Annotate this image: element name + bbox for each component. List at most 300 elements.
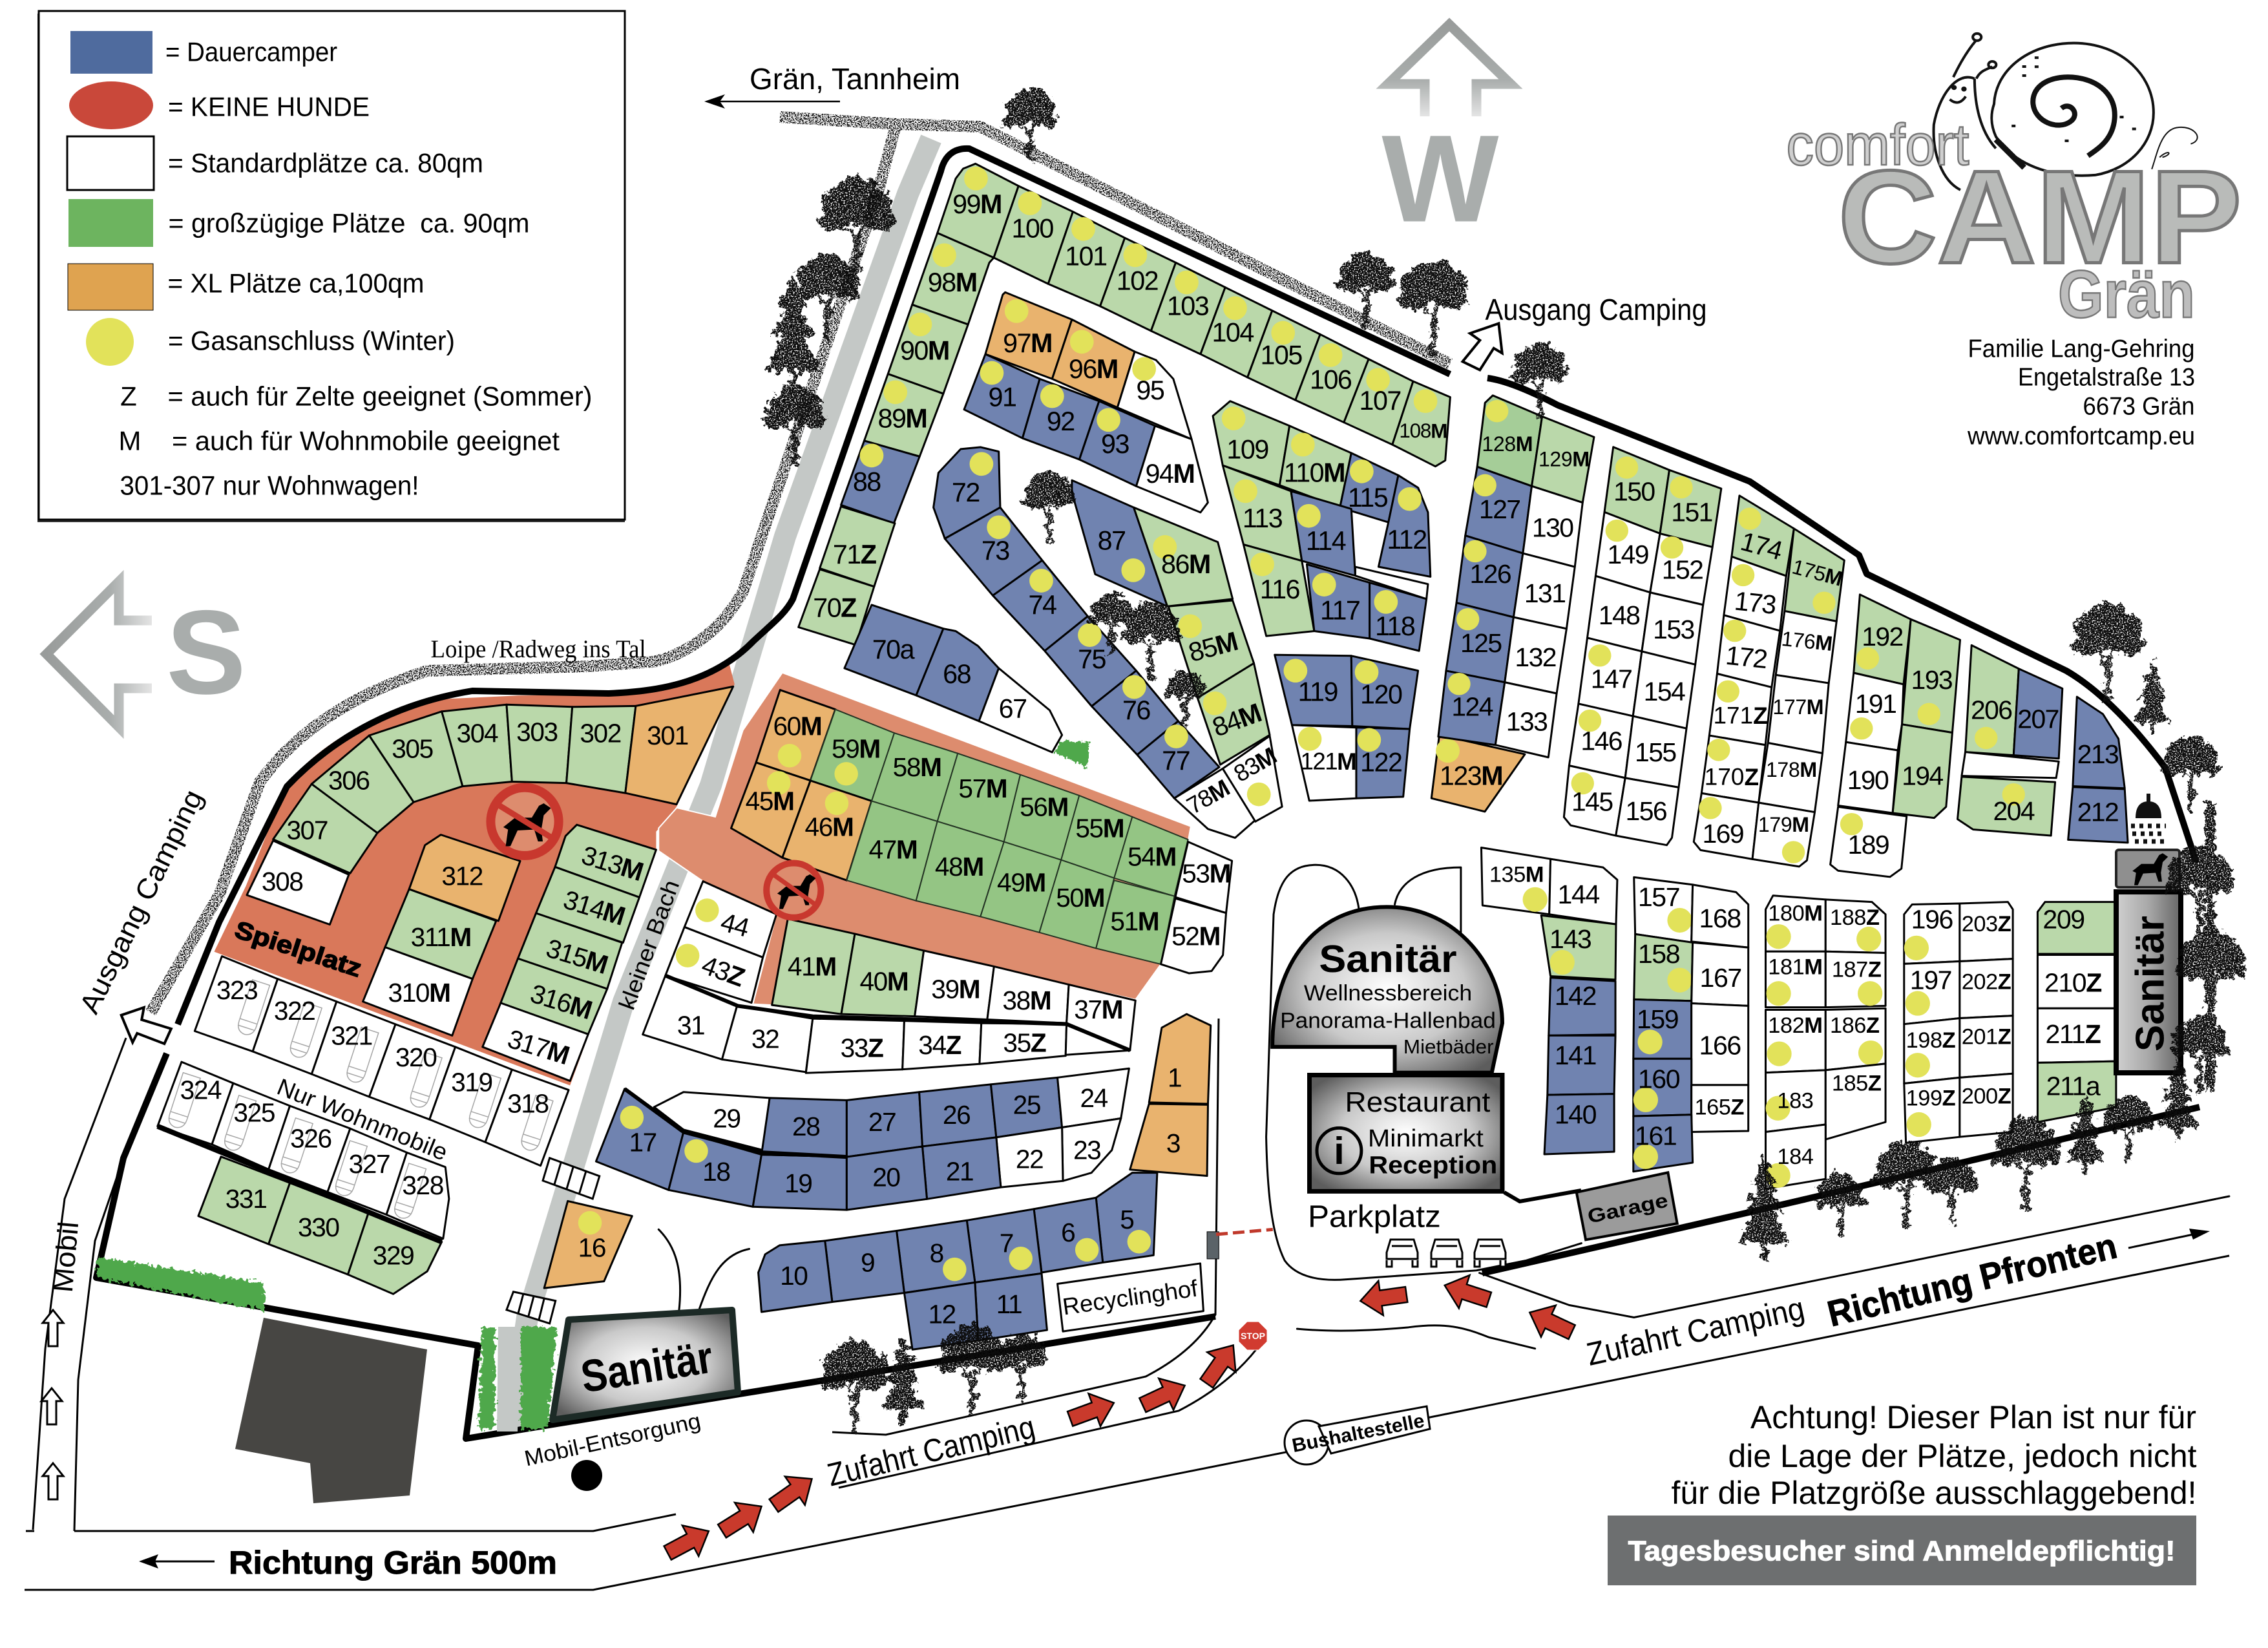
Restaurant and reception building: i <box>1334 1129 1345 1172</box>
pitch 115: 115 <box>1348 483 1388 512</box>
parking label: Parkplatz <box>1308 1200 1441 1234</box>
pitch 324: 324 <box>180 1075 222 1105</box>
pitch 39M: 39M <box>931 975 980 1004</box>
pitch 186Z: 186Z <box>1830 1013 1880 1038</box>
direction label Grän Tannheim <box>704 62 960 109</box>
pitch 190 <box>1838 742 1898 813</box>
path lines to Sanitär <box>658 1229 750 1311</box>
pitch 129M: 129M <box>1538 448 1590 471</box>
pitch 150: 150 <box>1613 476 1655 506</box>
pitch 122 <box>1356 728 1410 798</box>
pitch 148: 148 <box>1599 600 1639 630</box>
pitch 198Z <box>1904 1019 1960 1084</box>
pitch 155: 155 <box>1635 737 1676 767</box>
compass west arrow and letter <box>1381 25 1511 248</box>
pitch 314M: 314M <box>560 885 628 931</box>
pitch 194: 194 <box>1902 761 1943 791</box>
pitch 110M: 110M <box>1284 458 1345 488</box>
pitch 131: 131 <box>1524 578 1565 608</box>
icon: dog wash box <box>2116 850 2179 887</box>
pitch 41M: 41M <box>788 951 836 981</box>
pitch 209 <box>2037 902 2116 954</box>
legend: Z Zelte: = auch für Zelte geeignet (Sommer) <box>168 381 592 411</box>
pitch 109: 109 <box>1226 435 1268 465</box>
address block <box>1967 335 2195 450</box>
pitch 49M: 49M <box>997 868 1045 898</box>
pitch 142: 142 <box>1555 981 1596 1011</box>
pitch 76: 76 <box>1122 695 1150 725</box>
arrow: Ausgang Camping west <box>121 1008 171 1044</box>
pitch 12 <box>904 1282 978 1349</box>
pitch 128M: 128M <box>1482 432 1533 456</box>
pitch 31: 31 <box>677 1011 704 1041</box>
pitch 176M <box>1776 611 1836 683</box>
grass strip south-west <box>97 1257 264 1311</box>
pitch 312 <box>409 835 520 921</box>
pitch 301: 301 <box>647 721 688 750</box>
pitch 174: 174 <box>1738 526 1785 565</box>
pitch 92 <box>1022 379 1099 460</box>
pitch 159: 159 <box>1637 1004 1678 1034</box>
tree <box>819 1340 890 1433</box>
pitch 207: 207 <box>2017 704 2059 734</box>
pitch 307 <box>273 784 377 873</box>
tree <box>1815 1172 1865 1238</box>
tree <box>764 275 821 391</box>
pitch 96M: 96M <box>1069 354 1118 384</box>
Sanitär dome building <box>1272 907 1502 1073</box>
pitch 10: 10 <box>780 1261 808 1291</box>
pitch 3: 3 <box>1166 1128 1180 1158</box>
pitch 211a <box>2037 1061 2116 1122</box>
legend shadow and frame <box>37 11 625 522</box>
pitch 105: 105 <box>1260 340 1302 370</box>
pitch 102: 102 <box>1117 266 1158 296</box>
pitch 211a: 211a <box>2046 1071 2101 1101</box>
pitch 146: 146 <box>1580 726 1622 755</box>
pitch 304 <box>442 704 512 787</box>
pitch 34Z <box>903 1021 982 1070</box>
pitch 185Z: 185Z <box>1832 1072 1882 1096</box>
pitch 181M <box>1765 951 1825 1008</box>
pitch 44: 44 <box>718 907 752 943</box>
pitch 10 <box>759 1241 832 1312</box>
pitch 165Z: 165Z <box>1694 1095 1744 1119</box>
pitch 330: 330 <box>298 1212 339 1242</box>
pitch 54M: 54M <box>1128 842 1176 872</box>
pitch 182M: 182M <box>1768 1013 1823 1038</box>
pitch 85M: 85M <box>1185 626 1241 668</box>
pitch 193: 193 <box>1911 665 1952 695</box>
pitch 147: 147 <box>1591 664 1632 694</box>
pitch 45M <box>731 763 810 858</box>
pitch 39M <box>915 951 994 1020</box>
pitch 103 <box>1151 262 1225 354</box>
grass patch <box>1054 740 1089 768</box>
grass strips at Sanitär <box>478 1327 557 1429</box>
pitch 84M: 84M <box>1208 698 1265 743</box>
pitch 198Z: 198Z <box>1906 1028 1956 1053</box>
pitch 302: 302 <box>580 718 621 748</box>
pitch 127 <box>1465 467 1532 553</box>
pitch 167 <box>1692 942 1748 1006</box>
pitch 146 <box>1569 704 1633 778</box>
pitch 101: 101 <box>1065 241 1107 271</box>
pitch 172 <box>1717 615 1780 687</box>
gap box by 204 <box>1962 752 2059 778</box>
pitch 144 <box>1549 859 1617 924</box>
pitch 185Z <box>1825 1064 1885 1139</box>
pitch 100: 100 <box>1012 214 1053 244</box>
pitch 113 <box>1223 465 1302 561</box>
pitch 327 <box>328 1128 407 1214</box>
tree <box>936 1324 1007 1417</box>
pitch 5 <box>1096 1173 1157 1263</box>
pitch 182M <box>1765 1009 1825 1073</box>
pitch 104: 104 <box>1212 317 1254 347</box>
icon: no dogs sign west <box>490 788 559 856</box>
pitch 107: 107 <box>1360 386 1401 416</box>
pitch 305: 305 <box>392 734 433 763</box>
pitch 18: 18 <box>702 1157 730 1187</box>
label Loipe Radweg: Loipe /Radweg ins Tal <box>430 635 646 663</box>
pitch 22 <box>996 1127 1063 1187</box>
pitch 123M: 123M <box>1440 761 1502 791</box>
pitch 31 <box>643 975 737 1059</box>
pitch 202Z <box>1960 959 2013 1019</box>
pitch 72 <box>934 447 1000 538</box>
pitch 150 <box>1604 447 1669 534</box>
arrows: Mobil road <box>41 1310 63 1499</box>
pitch 109 <box>1213 401 1290 485</box>
Sanitär dome building: Mietbäder <box>1403 1036 1494 1058</box>
pitch 28: 28 <box>792 1112 819 1141</box>
icon: stop sign <box>1239 1322 1267 1350</box>
pitch 106 <box>1296 334 1369 423</box>
pitch 99M <box>938 164 1018 258</box>
pitch 147 <box>1579 638 1642 716</box>
pitch 45M: 45M <box>746 786 794 816</box>
pitch 46M: 46M <box>805 812 853 841</box>
pitch 149 <box>1595 512 1660 593</box>
label Spielplatz: Spielplatz <box>231 916 365 983</box>
access road line <box>1297 1196 2229 1349</box>
pitch 204 <box>1957 777 2055 836</box>
pitch 6: 6 <box>1061 1218 1075 1247</box>
pitch 6 <box>1034 1198 1103 1273</box>
pitch 85M <box>1168 600 1254 698</box>
pitch 18 <box>669 1132 761 1207</box>
pitch 165Z <box>1692 1085 1748 1132</box>
legend: keine Hunde: = KEINE HUNDE <box>168 92 370 121</box>
tree <box>1021 471 1076 543</box>
Sanitär dome building: Sanitär <box>1319 937 1457 980</box>
pitch 103: 103 <box>1167 291 1209 321</box>
pitch 154 <box>1633 651 1696 728</box>
pitch 88: 88 <box>853 467 881 496</box>
pitch 203Z: 203Z <box>1962 912 2011 936</box>
address block: www.comfortcamp.eu <box>1967 423 2195 450</box>
pitch 303: 303 <box>516 717 558 746</box>
pitch 315M <box>518 913 622 989</box>
pitch 35Z <box>980 1023 1067 1064</box>
pitch 157 <box>1634 877 1693 942</box>
pitch 211Z <box>2037 1008 2116 1062</box>
label Mobil: Mobil <box>47 1220 85 1294</box>
notice text: die Lage der Plätze, jedoch nicht <box>1728 1438 2197 1474</box>
red no-dog road zone west <box>214 662 735 1086</box>
pitch 37M: 37M <box>1074 995 1122 1024</box>
pitch 95 <box>1117 352 1192 439</box>
pitch 26 <box>919 1084 996 1146</box>
pitch 330 <box>269 1183 368 1274</box>
pitch 27 <box>846 1092 923 1157</box>
perimeter wall south-east <box>1482 1107 2200 1273</box>
tree <box>1926 1158 1977 1224</box>
notice text <box>1671 1399 2197 1511</box>
pitch 40M <box>841 934 924 1017</box>
pitch 94M: 94M <box>1146 459 1194 489</box>
pitch 37M <box>1067 985 1135 1050</box>
pitch 1: 1 <box>1168 1062 1181 1092</box>
pitch 318: 318 <box>507 1089 549 1119</box>
pitch 113: 113 <box>1243 503 1283 533</box>
pitch 189 <box>1831 807 1907 877</box>
pitch 108M: 108M <box>1399 419 1447 442</box>
pitch 26: 26 <box>943 1100 970 1130</box>
pitch 8 <box>897 1220 975 1293</box>
icon: cars parking <box>1387 1240 1506 1267</box>
pitch 328 <box>386 1152 449 1239</box>
address block: 6673 Grän <box>2083 393 2194 420</box>
arrows: red approach east <box>1358 1269 1579 1348</box>
pitch 89M <box>864 374 943 456</box>
pitch 68: 68 <box>943 659 971 689</box>
pitch 166: 166 <box>1699 1031 1741 1061</box>
pitch 326 <box>269 1106 350 1192</box>
pitch 70a <box>845 605 943 695</box>
legend: XL Plätze: = XL Plätze ca,100qm <box>168 268 424 299</box>
logo: Grän: Grän <box>2058 257 2195 332</box>
pitch 100 <box>994 186 1073 284</box>
pitch 301 <box>625 686 733 805</box>
pitch 325 <box>212 1083 290 1169</box>
pitch 29: 29 <box>713 1103 740 1133</box>
pitch 153: 153 <box>1653 615 1694 644</box>
pitch 17 <box>596 1089 684 1190</box>
pitch 132 <box>1505 617 1566 693</box>
pitch 318 <box>485 1070 569 1166</box>
pitch 35Z: 35Z <box>1003 1028 1046 1057</box>
label Zufahrt Camping east: Zufahrt Camping <box>1583 1290 1808 1373</box>
Sanitär east building: Sanitär <box>2128 916 2172 1051</box>
label Kleiner Bach: kleiner Bach <box>614 877 684 1013</box>
pitch 196: 196 <box>1911 904 1953 934</box>
Sanitär dome building: Wellnessbereich <box>1304 981 1472 1006</box>
pitch 200Z: 200Z <box>1962 1084 2011 1108</box>
compass west arrow and letter: W <box>1381 109 1499 248</box>
pitch 89M: 89M <box>878 403 927 433</box>
pitch 33Z: 33Z <box>841 1033 883 1063</box>
tree <box>762 385 826 467</box>
pitch 191 <box>1846 673 1904 750</box>
pitch 158: 158 <box>1638 939 1680 969</box>
pitch 183: 183 <box>1777 1088 1813 1113</box>
pitch 129M <box>1532 416 1594 503</box>
perimeter fence north and west <box>178 149 1450 1024</box>
pitch 50M: 50M <box>1056 883 1104 913</box>
dividing wall 17-28 <box>625 1089 846 1157</box>
gap triangle by 35Z <box>1066 1024 1130 1055</box>
pitch 159 <box>1633 999 1692 1059</box>
pitch 54M <box>1114 817 1188 896</box>
pitch 302 <box>567 706 636 793</box>
pitch 83M: 83M <box>1229 742 1281 787</box>
pitch 33Z <box>806 1019 904 1073</box>
pitch 83M <box>1223 736 1282 821</box>
legend panel <box>37 11 625 522</box>
pitch 323 <box>194 956 278 1051</box>
pitch 20: 20 <box>872 1163 900 1192</box>
pitch 94M <box>1136 426 1208 512</box>
tree <box>2158 1058 2199 1142</box>
Recyclinghof box: Recyclinghof <box>1061 1274 1200 1320</box>
pitch 125 <box>1446 603 1513 682</box>
pitch 329: 329 <box>373 1241 414 1271</box>
pitch 203Z <box>1960 902 2013 961</box>
tree <box>2065 1094 2105 1176</box>
trees <box>762 89 2247 1433</box>
pitch 11: 11 <box>996 1289 1022 1319</box>
legend: großzügige Plätze <box>68 199 530 247</box>
pitch 184 <box>1765 1125 1825 1189</box>
pitch 73 <box>945 507 1042 595</box>
pitch 306 <box>311 735 414 833</box>
pitch 75: 75 <box>1078 644 1106 674</box>
pitch 9 <box>825 1231 904 1302</box>
pitch 115 <box>1340 453 1398 522</box>
pitch 47M: 47M <box>868 834 917 864</box>
zone: west blocks <box>74 635 733 1324</box>
creek section between grass <box>497 1327 520 1431</box>
pitch 322: 322 <box>274 996 315 1026</box>
pitch 308: 308 <box>262 867 303 896</box>
icon: stop sign: STOP <box>1241 1331 1265 1341</box>
pitch 179M: 179M <box>1758 813 1809 836</box>
pitch 319: 319 <box>451 1068 492 1097</box>
pitch 74 <box>992 560 1087 651</box>
pitch 75 <box>1045 617 1136 706</box>
garage: Garage <box>1586 1189 1670 1228</box>
pitch 104 <box>1201 288 1272 377</box>
legend: Z Zelte: Z <box>120 381 137 411</box>
pitch 88 <box>841 441 919 523</box>
pitch 175M <box>1785 529 1845 621</box>
pitch 28 <box>761 1098 846 1157</box>
pitch 53M <box>1175 842 1232 913</box>
logo: comfort: comfort <box>1786 113 1969 178</box>
pitch 173: 173 <box>1733 586 1777 620</box>
pitch 316M: 316M <box>527 978 595 1025</box>
legend: Standardplätze: = Standardplätze ca. 80qm <box>168 147 483 178</box>
pitch 55M <box>1061 796 1132 878</box>
pitch 120: 120 <box>1360 679 1402 709</box>
pitch 106: 106 <box>1310 365 1352 395</box>
legend: keine Hunde <box>69 81 370 129</box>
pitch 325: 325 <box>233 1098 275 1128</box>
pitch 112 <box>1378 475 1431 576</box>
pitch 166 <box>1692 1004 1748 1085</box>
pitch 178M <box>1759 743 1823 812</box>
Sanitär dome building: Panorama-Hallenbad <box>1280 1008 1496 1033</box>
pitch 44 <box>684 882 777 957</box>
pitch 116: 116 <box>1260 575 1300 604</box>
pitch 121M <box>1292 725 1356 801</box>
pitch 310M <box>363 947 472 1035</box>
legend: Standardplätze <box>67 136 483 190</box>
arrows: red approach west <box>660 1335 1248 1569</box>
pitch 93: 93 <box>1101 429 1129 459</box>
notice text: Achtung! Dieser Plan ist nur für <box>1750 1399 2196 1435</box>
pitch 314M <box>536 867 640 943</box>
logo: snail <box>1934 34 2198 190</box>
pitch 67 <box>979 668 1062 752</box>
red no-dog road zone east <box>658 673 1191 1005</box>
pitch 78M <box>1174 768 1255 838</box>
pitch 176M: 176M <box>1780 627 1833 655</box>
Restaurant and reception building: Reception <box>1369 1151 1497 1179</box>
pitch 20 <box>846 1146 927 1210</box>
legend: großzügige Plätze: = großzügige Plätze ca. 90qm <box>168 208 530 238</box>
pitch 7 <box>967 1209 1042 1282</box>
pitch 27: 27 <box>868 1107 896 1137</box>
pitch 116 <box>1243 545 1314 636</box>
tree <box>1001 89 1058 164</box>
pitch 17: 17 <box>629 1128 656 1157</box>
pitch 130: 130 <box>1532 513 1573 543</box>
pitch 168 <box>1692 885 1748 947</box>
pitch 326: 326 <box>290 1124 331 1154</box>
creek: kleiner Bach <box>510 139 931 1431</box>
pitch 324 <box>158 1062 233 1145</box>
pitch 193 <box>1902 619 1960 733</box>
tree <box>1872 1140 1939 1228</box>
pitch 114 <box>1291 491 1355 576</box>
pitch 183 <box>1765 1070 1825 1132</box>
pitch 132: 132 <box>1515 642 1556 672</box>
pitch 303 <box>507 704 572 783</box>
pitch 207 <box>2013 669 2063 759</box>
pitch 34Z: 34Z <box>918 1030 961 1060</box>
legend: XL Plätze <box>68 264 424 310</box>
pitch 25: 25 <box>1013 1090 1040 1119</box>
pitch 212: 212 <box>2077 798 2118 827</box>
address block: Familie Lang-Gehring <box>1968 335 2194 363</box>
pitch 117 <box>1307 564 1370 639</box>
pitch 131 <box>1513 553 1575 629</box>
zone: north-east blocks <box>1438 396 2128 877</box>
pitch 144: 144 <box>1557 880 1599 909</box>
pitch 186Z <box>1825 1008 1885 1070</box>
pitch 118: 118 <box>1375 611 1415 641</box>
gap box by 112 <box>1355 567 1428 599</box>
pitch 12: 12 <box>928 1300 956 1329</box>
pitch 200Z <box>1960 1073 2013 1137</box>
pitch 317M <box>483 1003 588 1081</box>
pitch 180M <box>1765 896 1825 951</box>
pitch 126: 126 <box>1469 559 1511 589</box>
pitch 305 <box>369 712 463 802</box>
